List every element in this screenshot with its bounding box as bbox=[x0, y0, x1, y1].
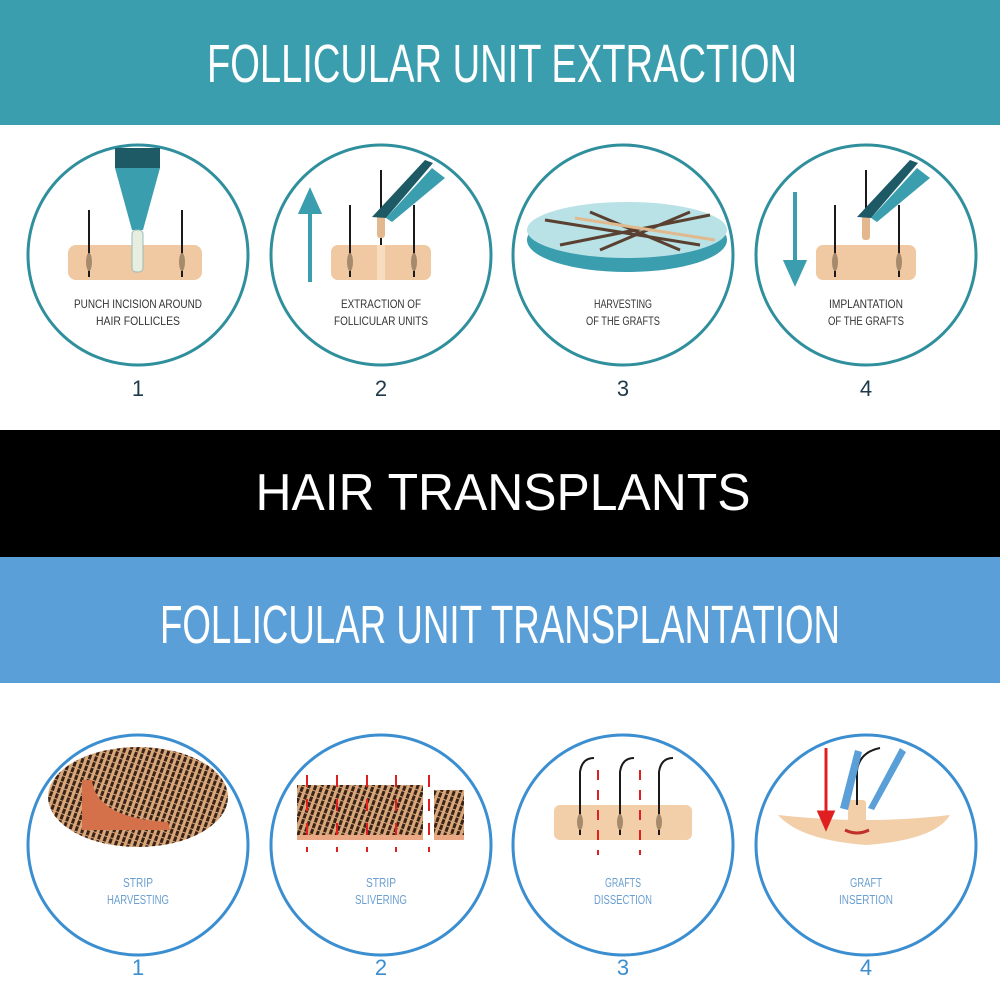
number 2: 2 bbox=[375, 376, 387, 401]
panel: FUE step 1: HAIR FOLLICLES bbox=[96, 314, 180, 328]
icon: down arrow bbox=[786, 192, 804, 282]
panel: FUE step 2 bbox=[271, 145, 491, 365]
panel: FUT step 2: SLIVERING bbox=[355, 892, 407, 907]
panel: FUT step 4: GRAFT bbox=[850, 875, 882, 890]
banner: FUE title bbox=[0, 0, 1000, 125]
panel: FUT step 4 bbox=[756, 735, 976, 955]
banner: FUT title bbox=[0, 557, 1000, 683]
icon: up arrow bbox=[301, 192, 319, 282]
number 1: 1 bbox=[132, 955, 144, 980]
panel: FUE step 4 bbox=[756, 145, 976, 365]
panel: FUE step 3: OF THE GRAFTS bbox=[586, 314, 660, 328]
panel: FUE step 3 bbox=[513, 145, 733, 365]
panel: FUT step 2: STRIP bbox=[366, 875, 396, 890]
panel: FUE step 2: FOLLICULAR UNITS bbox=[334, 314, 428, 328]
panel: FUE step 1: PUNCH INCISION AROUND bbox=[74, 297, 202, 311]
number 4: 4 bbox=[860, 376, 872, 401]
number 4: 4 bbox=[860, 955, 872, 980]
banner: HAIR TRANSPLANTS: HAIR TRANSPLANTS bbox=[256, 464, 750, 522]
number 2: 2 bbox=[375, 955, 387, 980]
panel: FUT step 3: GRAFTS bbox=[605, 875, 641, 890]
panel: FUE step 1 bbox=[28, 145, 248, 365]
banner: HAIR TRANSPLANTS bbox=[0, 430, 1000, 557]
panel: FUT step 3: DISSECTION bbox=[594, 892, 652, 907]
number 1: 1 bbox=[132, 376, 144, 401]
panel: FUT step 4: INSERTION bbox=[839, 892, 893, 907]
number 3: 3 bbox=[617, 955, 629, 980]
panel: FUE step 4: IMPLANTATION bbox=[829, 297, 903, 311]
panel: FUT step 1: STRIP bbox=[123, 875, 153, 890]
icon: red down arrow bbox=[819, 748, 833, 828]
panel: FUT step 2 bbox=[271, 735, 491, 955]
panel: FUE step 3: HARVESTING bbox=[594, 297, 652, 311]
panel: FUT step 3 bbox=[513, 735, 733, 955]
panel: FUT step 1: HARVESTING bbox=[107, 892, 169, 907]
panel: FUE step 4: OF THE GRAFTS bbox=[828, 314, 904, 328]
number 3: 3 bbox=[617, 376, 629, 401]
panel: FUE step 2: EXTRACTION OF bbox=[341, 297, 421, 311]
panel: FUT step 1 bbox=[28, 735, 248, 955]
